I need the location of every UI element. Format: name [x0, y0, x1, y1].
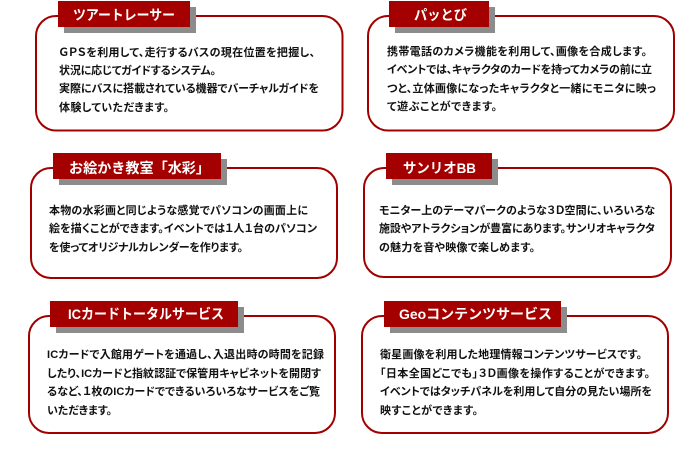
text block: ICカードトータルサービス description [47, 347, 324, 417]
text block: パッとび description: 携帯電話のカメラ機能を利用して、画像を合成します。 [387, 44, 647, 58]
panel: サンリオBB [364, 153, 671, 277]
text block: Geoコンテンツサービス description: 衛星画像を利用した地理情報コンテンツサービスです。 [380, 347, 642, 361]
text block: サンリオBB description: 施設やアトラクションが豊富にあります。サンリオキャラクタ [379, 221, 655, 235]
heading: お絵かき教室「水彩」: お絵かき教室「水彩」 [69, 160, 210, 176]
text block: ICカードトータルサービス description: ICカードで入館用ゲートを通過し、入退出時の時間を記録 [47, 347, 324, 361]
text block: Geoコンテンツサービス description: イベントではタッチパネルを利用して自分の見たい場所を [380, 384, 652, 398]
text block: Geoコンテンツサービス description: 「日本全国どこでも」３Ｄ画像を操作することができます。 [380, 366, 650, 380]
text block: お絵かき教室 description: 絵を描くことができます。イベントでは１人１台のパソコン [49, 221, 317, 235]
text block: サンリオBB description: の魅力を音や映像で楽しめます。 [379, 240, 535, 254]
text block: ICカードトータルサービス description: したり、ICカードと指紋認証で保管用キャビネットを開閉す [47, 366, 322, 380]
heading: サンリオBB: サンリオBB [403, 160, 476, 176]
text block: Geoコンテンツサービス description [380, 347, 652, 417]
text block: ツアートレーサー description: ＧＰＳを利用して、走行するバスの現在位置を把握し、 [59, 45, 315, 59]
text block: ツアートレーサー description [59, 45, 319, 114]
text block: パッとび description: つと、立体画像になったキャラクタと一緒にモニタに映っ [387, 81, 656, 95]
text block: ICカードトータルサービス description: いただきます。 [47, 404, 112, 417]
heading: Geoコンテンツサービス: Geoコンテンツサービス [399, 306, 552, 322]
text block: パッとび description [387, 44, 656, 113]
panel: ツアートレーサー [36, 1, 342, 130]
panel: Geoコンテンツサービス [362, 301, 668, 433]
heading: ツアートレーサー: ツアートレーサー [73, 7, 175, 23]
text block: Geoコンテンツサービス description: 映すことができます。 [380, 403, 478, 417]
text block: ツアートレーサー description: 実際にバスに搭載されている機器でバーチャルガイドを [59, 81, 319, 95]
text block: お絵かき教室 description: を使ってオリジナルカレンダーを作ります。 [49, 240, 243, 254]
text block: お絵かき教室 description: 本物の水彩画と同じような感覚でパソコンの画面上に [49, 203, 308, 217]
panel: お絵かき教室「水彩」 [31, 153, 337, 278]
heading: パッとび: パッとび [414, 7, 467, 23]
panel: ICカードトータルサービス [29, 301, 335, 433]
panel: パッとび [368, 1, 674, 130]
text block: パッとび description: て遊ぶことができます。 [387, 99, 497, 113]
text block: お絵かき教室 description [49, 203, 317, 254]
text block: サンリオBB description [379, 203, 655, 254]
text block: ICカードトータルサービス description: るなど、１枚のICカードでできるいろいろなサービスをご覧 [47, 384, 320, 398]
text block: ツアートレーサー description: 体験していただきます。 [59, 100, 169, 114]
text block: パッとび description: イベントでは、キャラクタのカードを持ってカメラの前に立 [387, 62, 652, 76]
heading: ICカードトータルサービス: ICカードトータルサービス [68, 306, 224, 322]
text block: ツアートレーサー description: 状況に応じてガイドするシステム。 [59, 63, 216, 77]
text block: サンリオBB description: モニター上のテーマパークのような３Ｄ空間に、いろいろな [379, 203, 655, 217]
